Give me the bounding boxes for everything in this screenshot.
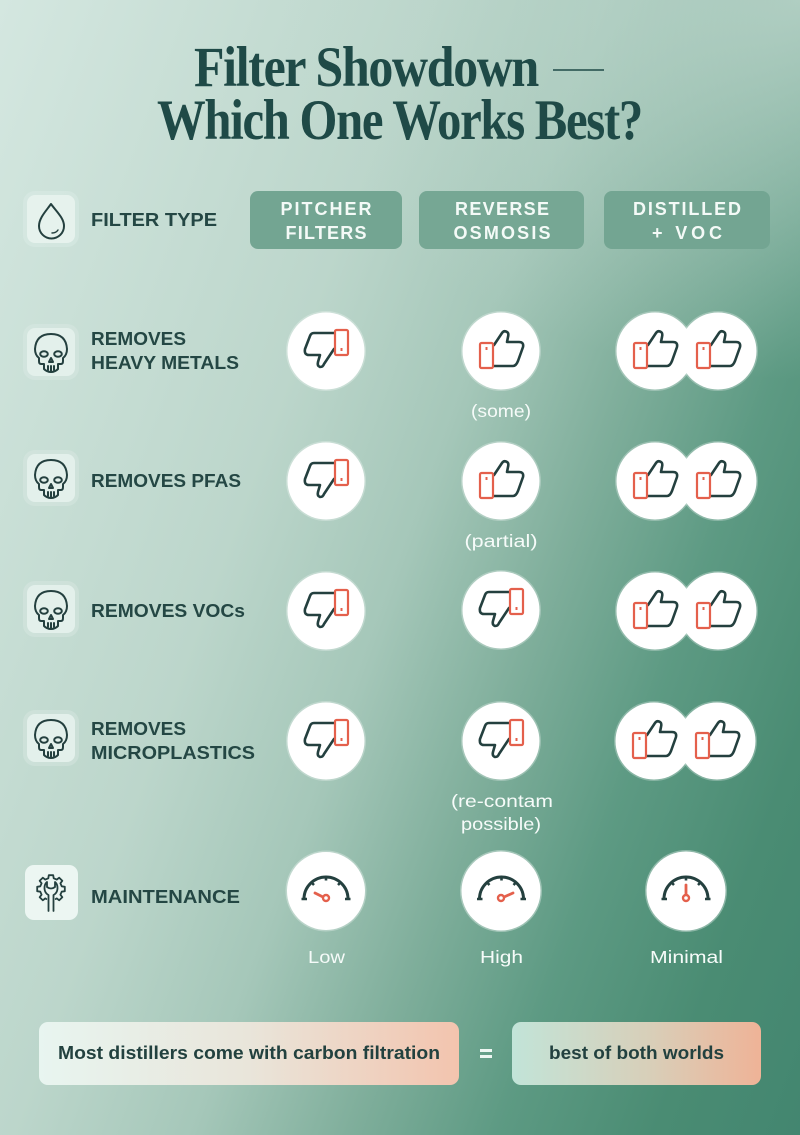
row label: removes vocs: REMOVES VOCs [91,601,245,621]
column header: distilled + voc: DISTILLED [633,199,741,219]
icons: two thumbs up [616,572,756,650]
icon: thumbs down [288,312,364,390]
callout: best of both worlds: best of both worlds [549,1042,724,1063]
row label: removes microplastics: REMOVES [91,719,186,739]
callout: distillers with carbon filtration: Most distillers come with carbon filtration [58,1042,440,1063]
note: some: (some) [471,401,531,421]
row label: filter type: FILTER TYPE [91,210,217,230]
column header: pitcher filters: FILTERS [286,223,366,243]
row label: maintenance: MAINTENANCE [91,887,240,907]
icon: thumbs down [288,702,364,780]
column header: distilled + voc: + VOC [652,223,722,243]
header row: filter type [23,191,770,249]
icon: skull [23,581,79,637]
icon: gauge high [462,852,540,930]
row: removes vocs [23,572,756,650]
row label: removes microplastics [91,719,255,763]
icon: gear and wrench [25,865,78,920]
note: re-contam possible: possible) [461,814,541,834]
row label: removes microplastics: MICROPLASTICS [91,743,255,763]
icon: thumbs up [462,442,540,520]
column header: reverse osmosis [419,191,584,249]
column header: pitcher filters: PITCHER [280,199,372,219]
equals sign [480,1049,492,1058]
icon: gauge low [287,852,365,930]
icon: skull [23,450,79,506]
column header: pitcher filters [250,191,402,249]
row label: removes heavy metals [91,329,239,373]
icon: thumbs down [462,702,540,780]
title: Which One Works Best? [157,89,642,152]
icon: skull [23,324,79,380]
note: partial: (partial) [464,531,538,551]
callout: distillers with carbon filtration [39,1022,459,1085]
row: removes heavy metals [23,312,756,421]
icon: thumbs down [462,572,540,648]
note: re-contam possible: (re-contam [451,791,553,811]
icon: gauge minimal [646,852,726,930]
caption: low: Low [308,947,345,967]
icon: thumbs down [288,442,364,520]
icon: thumbs up [462,312,540,390]
row: removes pfas [23,442,756,551]
column header: reverse osmosis: REVERSE [455,199,549,219]
row label: removes heavy metals: HEAVY METALS [91,353,239,373]
column header: distilled + voc [604,191,770,249]
caption: high: High [480,947,523,967]
row: maintenance [25,852,726,967]
callout: best of both worlds [512,1022,761,1085]
note: re-contam possible [451,791,553,834]
column header: reverse osmosis: OSMOSIS [454,223,550,243]
row label: removes heavy metals: REMOVES [91,329,186,349]
icons: two thumbs up [616,702,756,780]
icon: water drop [23,191,79,247]
title [157,36,642,152]
row: removes microplastics [23,702,756,834]
title: Filter Showdown [194,36,539,99]
row label: removes pfas: REMOVES PFAS [91,471,241,491]
icons: two thumbs up [616,442,756,520]
icon: thumbs down [288,572,364,650]
icon: skull [23,710,79,766]
caption: minimal: Minimal [650,947,723,967]
icons: two thumbs up [616,312,756,390]
